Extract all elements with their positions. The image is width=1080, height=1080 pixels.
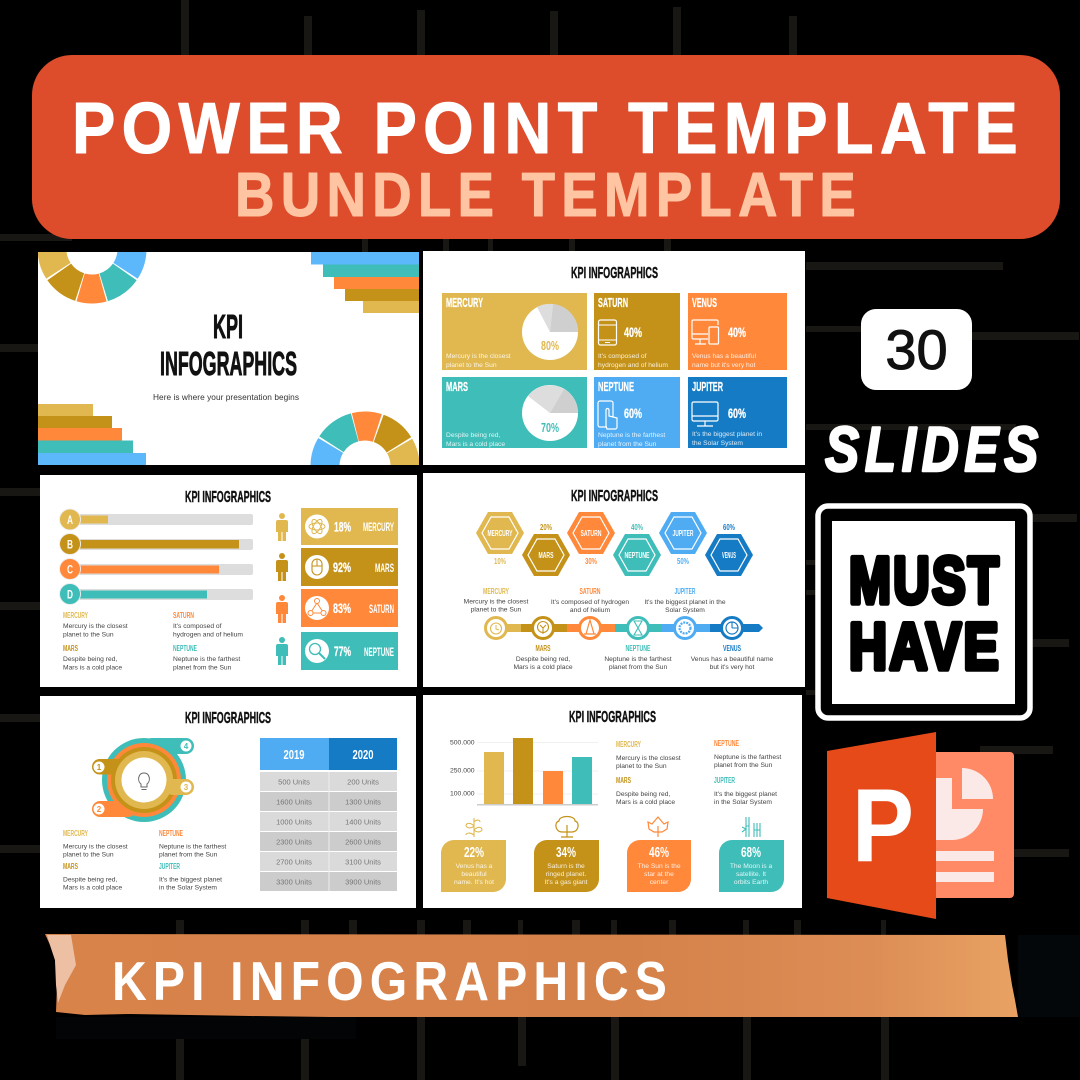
- icon: light bulb: [139, 773, 149, 790]
- badge: must have: [818, 506, 1030, 718]
- legend text: MERCURY: [616, 739, 641, 749]
- bar chart: 500.000: [450, 740, 475, 746]
- timeline descriptions below: planet from the Sun: [609, 664, 667, 671]
- legend text: MARS: [63, 643, 78, 653]
- card: 22%: beautiful: [461, 871, 487, 878]
- tile: jupiter: It's the biggest planet in: [692, 431, 762, 438]
- badge: 30: [861, 309, 972, 390]
- card: 22%: 22%: [464, 844, 484, 861]
- card: 46%: center: [650, 879, 669, 886]
- tile: mars: MARS: [446, 379, 468, 394]
- badge: must have: MUST: [849, 543, 1001, 617]
- units table: 200 Units: [347, 778, 379, 786]
- hexagon row: [476, 512, 753, 576]
- units table: 3300 Units: [276, 878, 312, 886]
- card: 68%: orbits Earth: [734, 879, 768, 886]
- tile: venus: 40%: [728, 324, 746, 340]
- icon: powerpoint logo: [827, 732, 1014, 919]
- legend text: Neptune is the farthest: [173, 656, 240, 663]
- slide heading: KPI INFOGRAPHICS: [571, 488, 658, 505]
- hexagon percentages: 30%: [585, 557, 597, 566]
- tile: neptune: Neptune is the farthest: [598, 432, 665, 439]
- card: 68%: satellite. It: [736, 871, 766, 878]
- legend text: Mars is a cold place: [63, 664, 122, 672]
- tile: neptune: [594, 377, 680, 448]
- footer label: KPI INFOGRAPHICS: [112, 950, 673, 1012]
- slide 6: bar chart and cards: [423, 695, 802, 908]
- stat: saturn 83%: [301, 589, 398, 627]
- tile: neptune: NEPTUNE: [598, 379, 634, 394]
- concentric ring diagram: [92, 738, 194, 822]
- card: 34%: ringed planet.: [546, 871, 586, 878]
- hexagon row: SATURN: [581, 529, 602, 538]
- hexagon percentages: 20%: [540, 523, 552, 532]
- hexagon row: NEPTUNE: [624, 551, 650, 560]
- card: 68%: [719, 840, 784, 892]
- legend text: planet to the Sun: [616, 763, 667, 770]
- badge: 30: 30: [885, 318, 948, 381]
- timeline descriptions below: [513, 643, 774, 671]
- legend text: NEPTUNE: [173, 643, 197, 653]
- timeline descriptions above: Solar System: [665, 607, 705, 614]
- legend text: Neptune is the farthest: [714, 754, 781, 761]
- timeline descriptions below: VENUS: [723, 643, 741, 653]
- stat: mercury 18%: 18%: [334, 518, 351, 534]
- card: 34%: Saturn is the: [547, 863, 585, 870]
- units table: 1600 Units: [276, 798, 312, 806]
- card: 22%: Venus has a: [456, 863, 493, 870]
- legend text: Mars is a cold place: [616, 799, 675, 806]
- slide heading: KPI INFOGRAPHICS: [185, 710, 271, 727]
- icon: plant: [466, 818, 482, 837]
- units table: 500 Units: [278, 778, 310, 786]
- tile: mercury: [442, 293, 587, 370]
- concentric ring diagram: 4: [184, 742, 189, 751]
- footer tape banner: [45, 934, 1018, 1017]
- progress bars: D: [67, 588, 73, 602]
- timeline descriptions above: MERCURY: [483, 586, 509, 596]
- timeline descriptions below: MARS: [536, 643, 551, 653]
- tile: saturn: 40%: [624, 324, 642, 340]
- timeline descriptions above: planet to the Sun: [471, 606, 522, 614]
- units table: 2019: [284, 747, 304, 762]
- slide 1: cover: [38, 252, 419, 465]
- progress bars: B: [67, 538, 73, 552]
- stat: mars 92%: 92%: [333, 559, 351, 575]
- bar chart: [450, 738, 598, 806]
- tile: mercury: Mercury is the closest: [446, 353, 511, 360]
- progress bars: A: [67, 513, 73, 527]
- units table: 2020: [352, 747, 374, 762]
- tile: venus: name but it's very hot: [692, 362, 755, 369]
- legend text: Mercury is the closest: [63, 623, 128, 630]
- stat: saturn 83%: 83%: [333, 600, 351, 616]
- tile: jupiter: JUPITER: [692, 379, 723, 394]
- stat: mercury 18%: MERCURY: [363, 520, 394, 534]
- stat: mars 92%: [301, 548, 398, 586]
- legend text: Mars is a cold place: [63, 884, 122, 892]
- card: 46%: [627, 840, 691, 892]
- bar chart: 100.000: [450, 790, 475, 798]
- legend text: JUPITER: [159, 861, 180, 871]
- timeline descriptions below: Mars is a cold place: [513, 664, 573, 671]
- cover title: KPI: [213, 308, 243, 345]
- concentric ring diagram: 3: [184, 783, 189, 792]
- header banner: [32, 55, 1060, 239]
- legend text: [63, 828, 226, 892]
- card: 46%: star at the: [644, 871, 674, 878]
- tile: neptune: 60%: [624, 405, 642, 421]
- tile: mars: Despite being red,: [446, 432, 500, 439]
- legend text: MERCURY: [63, 610, 88, 620]
- stat: neptune 77%: [301, 632, 398, 670]
- tile: jupiter: [688, 377, 787, 448]
- slide heading: KPI INFOGRAPHICS: [569, 709, 656, 726]
- tile: venus: Venus has a beautiful: [692, 353, 756, 360]
- stat: neptune 77%: 77%: [334, 643, 351, 659]
- units table: 3900 Units: [345, 878, 381, 886]
- legend text: It's the biggest planet: [714, 791, 777, 798]
- tile: saturn: hydrogen and of helium: [598, 362, 668, 369]
- legend text: planet to the Sun: [63, 852, 114, 858]
- tile: saturn: SATURN: [598, 295, 628, 310]
- units table: 3100 Units: [345, 858, 381, 866]
- timeline descriptions above: SATURN: [580, 586, 600, 596]
- legend text: MARS: [616, 775, 631, 785]
- card: 68%: 68%: [741, 844, 761, 861]
- stat: neptune 77%: NEPTUNE: [364, 645, 394, 659]
- tile: saturn: [594, 293, 680, 370]
- legend text: [616, 738, 781, 806]
- tile: mercury: 80%: [541, 338, 559, 353]
- subtitle: BUNDLE TEMPLATE: [235, 161, 862, 230]
- icon: tree: [556, 816, 578, 837]
- legend text: JUPITER: [714, 775, 735, 785]
- card: 34%: 34%: [556, 844, 576, 861]
- legend text: MARS: [63, 861, 78, 871]
- hexagon percentages: 60%: [723, 523, 735, 532]
- units table: 2600 Units: [345, 838, 381, 846]
- slide 4: hexagons and timeline: [423, 473, 805, 687]
- legend text: It's composed of: [173, 623, 222, 630]
- card: 68%: The Moon is a: [730, 863, 772, 870]
- hexagon percentages: [494, 523, 735, 566]
- card: 22%: name. It's hot: [454, 879, 494, 886]
- card: 22%: [441, 840, 506, 892]
- legend text: Neptune is the farthest: [159, 844, 226, 850]
- timeline descriptions below: Despite being red,: [516, 656, 570, 663]
- hexagon percentages: 50%: [677, 557, 689, 566]
- legend text: NEPTUNE: [159, 828, 183, 838]
- units table: 2700 Units: [276, 858, 312, 866]
- slide heading: KPI INFOGRAPHICS: [571, 265, 658, 282]
- cover subtitle: Here is where your presentation begins: [153, 392, 299, 402]
- legend text: Despite being red,: [616, 791, 670, 798]
- timeline arrow: [486, 618, 763, 638]
- legend text: MERCURY: [63, 828, 88, 838]
- timeline descriptions below: Venus has a beautiful name: [691, 656, 774, 663]
- legend text: Mercury is the closest: [616, 755, 681, 762]
- icon: maple leaf: [648, 817, 668, 837]
- legend text: planet from the Sun: [159, 852, 218, 858]
- hexagon row: MERCURY: [488, 529, 513, 538]
- icon: person figures: [276, 513, 288, 665]
- legend text: in the Solar System: [714, 799, 772, 806]
- card: 34%: [534, 840, 599, 892]
- tile: mars: 70%: [541, 420, 559, 435]
- units table: [260, 738, 397, 891]
- tile: saturn: It's composed of: [598, 353, 647, 360]
- units table: 1300 Units: [345, 798, 381, 806]
- timeline descriptions above: JUPITER: [674, 586, 696, 596]
- bar chart: 250.000: [450, 768, 475, 774]
- timeline descriptions below: but it's very hot: [710, 664, 755, 671]
- units table: 2300 Units: [276, 838, 312, 846]
- progress bars: C: [67, 562, 73, 576]
- stat: saturn 83%: SATURN: [369, 602, 394, 616]
- timeline descriptions above: It's the biggest planet in the: [644, 599, 726, 606]
- decorative donuts and stairs: [36, 193, 420, 521]
- hexagon row: VENUS: [722, 551, 736, 560]
- stat: mars 92%: MARS: [375, 561, 394, 575]
- icon: bamboo: [742, 817, 760, 837]
- hexagon row: JUPITER: [672, 529, 694, 538]
- legend text: planet from the Sun: [714, 762, 773, 769]
- units table: 1400 Units: [345, 818, 381, 826]
- slide 5: rings and table: [40, 696, 416, 908]
- progress bars: [60, 509, 253, 604]
- legend text: NEPTUNE: [714, 738, 739, 748]
- tile: mars: [442, 377, 587, 448]
- tile: venus: VENUS: [692, 295, 717, 310]
- tile: neptune: planet from the Sun: [598, 441, 657, 448]
- timeline descriptions above: Mercury is the closest: [464, 598, 528, 606]
- legend text: in the Solar System: [159, 884, 217, 892]
- tile: jupiter: 60%: [728, 405, 746, 421]
- units table: 1000 Units: [276, 818, 312, 826]
- card: 46%: 46%: [649, 844, 669, 861]
- legend text: It's the biggest planet: [159, 876, 222, 884]
- slide 2: planet tiles: [423, 251, 805, 465]
- legend text: planet to the Sun: [63, 632, 114, 638]
- icon: powerpoint logo: P: [852, 768, 914, 884]
- legend text: Mercury is the closest: [63, 844, 128, 850]
- slide 1: cover: INFOGRAPHICS: [160, 345, 297, 382]
- slide heading: KPI INFOGRAPHICS: [185, 489, 271, 506]
- tile: mercury: MERCURY: [446, 295, 483, 310]
- hexagon row: MARS: [538, 551, 554, 560]
- legend text: Despite being red,: [63, 656, 117, 663]
- legend text: planet from the Sun: [173, 664, 232, 672]
- timeline descriptions above: It's composed of hydrogen: [551, 599, 629, 606]
- timeline descriptions below: NEPTUNE: [626, 643, 651, 653]
- concentric ring diagram: 1: [97, 763, 102, 772]
- concentric ring diagram: 2: [97, 805, 102, 814]
- tile: venus: [688, 293, 787, 370]
- legend text: SATURN: [173, 610, 194, 620]
- legend text: [63, 610, 243, 672]
- hexagon percentages: 10%: [494, 557, 506, 566]
- timeline descriptions above: and of helium: [570, 607, 611, 614]
- slide 3: progress bars: [40, 475, 417, 687]
- stat: mercury 18%: [301, 508, 398, 545]
- tile: mercury: planet to the Sun: [446, 362, 497, 369]
- hexagon percentages: 40%: [631, 523, 643, 532]
- badge: must have: HAVE: [849, 609, 1001, 683]
- tile: mars: Mars is a cold place: [446, 441, 505, 448]
- legend text: hydrogen and of helium: [173, 632, 243, 638]
- timeline descriptions below: Neptune is the farthest: [604, 656, 672, 663]
- legend text: Despite being red,: [63, 876, 117, 884]
- tile: jupiter: the Solar System: [692, 440, 743, 447]
- card: 46%: The Sun is the: [637, 863, 681, 870]
- timeline descriptions above: [464, 586, 726, 614]
- card: 34%: It's a gas giant: [545, 879, 588, 886]
